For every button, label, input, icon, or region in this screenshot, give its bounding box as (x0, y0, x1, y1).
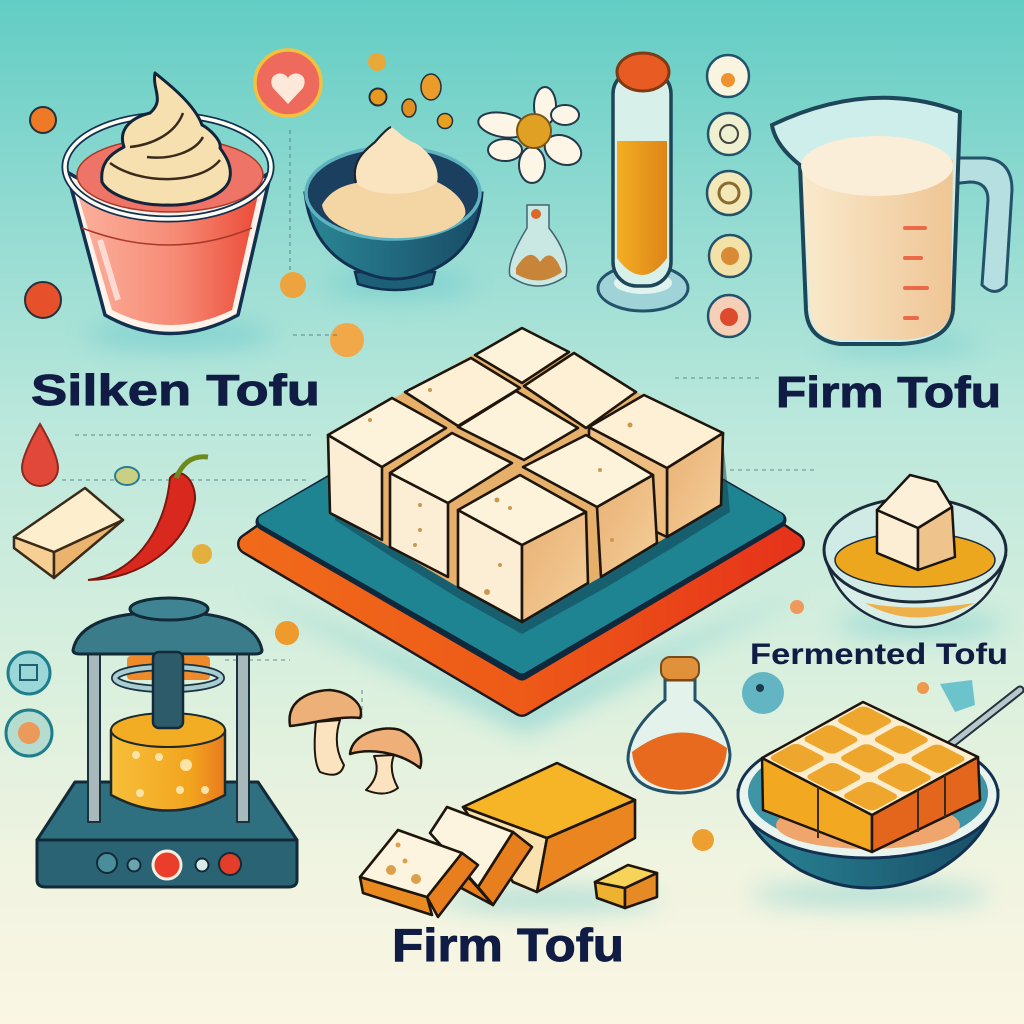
title: Firm Tofu upper: Firm Tofu (776, 368, 1001, 417)
icon: heart badge (255, 50, 321, 116)
cube backing (328, 328, 723, 622)
cube shadow (330, 440, 730, 634)
icon: fried tofu bowl with spoon (738, 690, 1020, 888)
icon: mushrooms (290, 690, 421, 794)
dashed leader lines (62, 130, 815, 720)
title: Silken Tofu: Silken Tofu (31, 366, 320, 415)
middle slice (450, 870, 493, 905)
platform: teal layer (264, 372, 778, 672)
cup body (67, 172, 271, 334)
soft stippled shadows (85, 271, 1005, 912)
front slice (360, 877, 432, 915)
tofu speckles (368, 388, 632, 595)
icon: test tube on stand (598, 53, 688, 311)
whipped cream (102, 73, 230, 205)
holes (386, 842, 421, 884)
small cube (595, 882, 625, 908)
icon: chili pepper (88, 457, 212, 580)
icon: firm tofu sliced loaf (360, 763, 657, 917)
icon: silken tofu dessert cup (65, 73, 271, 334)
liquid surface (77, 138, 263, 212)
icon: badge column (707, 55, 751, 337)
icon: bowl with cream (305, 127, 482, 290)
icon: platform with tofu cubes (248, 328, 794, 706)
icon: measuring jug (772, 98, 1012, 344)
title: Fermented Tofu: Fermented Tofu (750, 638, 1008, 671)
icon: red droplet (22, 424, 58, 486)
small decorative dots (25, 53, 975, 851)
icon: small glass flask (509, 205, 567, 286)
icon: oil bottle (628, 657, 730, 793)
glass rim (65, 115, 271, 219)
cubes (328, 328, 723, 622)
icon: side badges (6, 652, 52, 756)
platform: orange layer (248, 480, 794, 706)
title: Firm Tofu lower: Firm Tofu (392, 919, 624, 971)
icon: flower (476, 87, 586, 183)
icon: bowl with sauce and tofu (824, 475, 1006, 627)
icon: small tofu block left (14, 488, 123, 578)
icon: tofu press machine (37, 598, 297, 887)
loaf (463, 807, 547, 892)
